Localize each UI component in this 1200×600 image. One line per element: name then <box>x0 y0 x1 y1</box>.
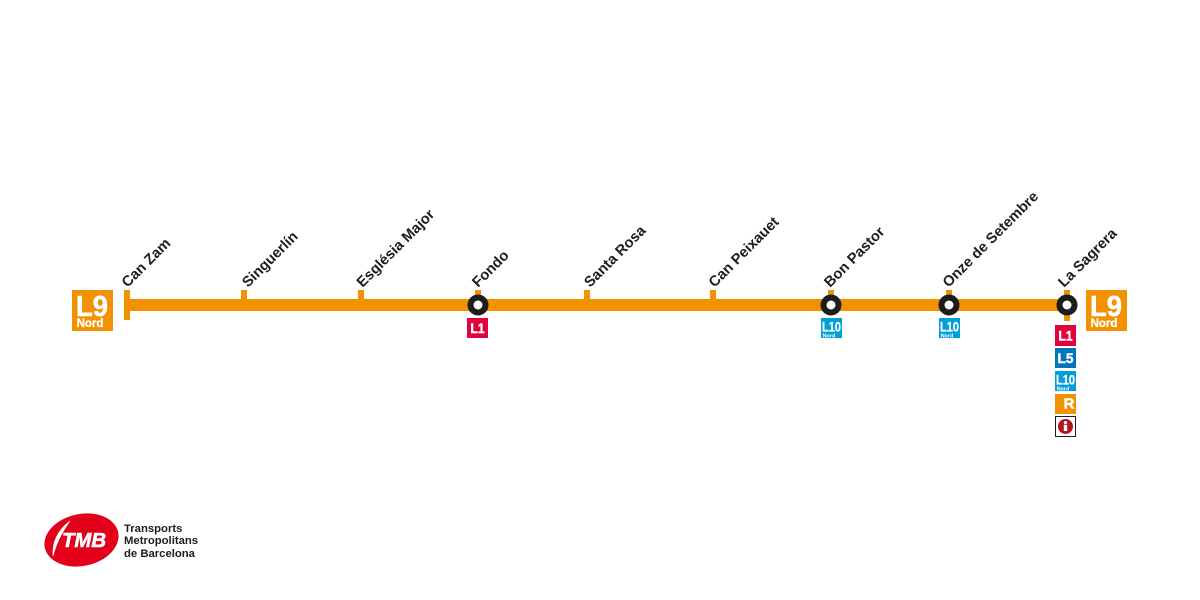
connection badge: Rodalies R: R <box>1064 396 1075 412</box>
connection badge: Rodalies R <box>1055 394 1076 414</box>
connection badge: L10 at Bon Pastor: L10 <box>822 318 841 334</box>
interchange marker: Bon Pastor <box>824 298 838 312</box>
connection badge: L10 at La Sagrera <box>1055 371 1076 392</box>
connection badge: L1 at La Sagrera: L1 <box>1058 328 1073 344</box>
station label: Santa Rosa: Santa Rosa <box>582 222 650 291</box>
connection badge: L10 at Onze de Setembre: L10 <box>940 318 959 334</box>
logo wordmark: Transports <box>124 523 182 535</box>
connection badge: L10 at La Sagrera: Nord <box>1057 386 1069 392</box>
L9 Nord badge: right: Nord <box>1091 318 1117 330</box>
connection badge: L1 at Fondo <box>467 318 488 338</box>
L9 Nord badge: right <box>1086 290 1127 331</box>
connection badge: L1 at Fondo: L1 <box>470 320 485 336</box>
station label: Can Zam: Can Zam <box>119 236 174 291</box>
connection badge: L10 at La Sagrera: L10 <box>1056 372 1075 388</box>
logo wordmark: Metropolitans <box>124 535 198 547</box>
station label: Singuerlín: Singuerlín <box>240 229 302 291</box>
connection badge: L5 at La Sagrera: L5 <box>1058 350 1074 366</box>
station label: Bon Pastor: Bon Pastor <box>822 224 888 291</box>
L9 Nord badge: left <box>72 290 113 331</box>
L9 Nord badge: left: Nord <box>77 318 103 330</box>
line track: L9 Nord <box>124 290 1070 321</box>
logo wordmark <box>124 523 198 560</box>
logo wordmark: de Barcelona <box>124 548 196 560</box>
station label: Fondo: Fondo <box>470 248 513 291</box>
connection badge: L1 at La Sagrera <box>1055 325 1076 346</box>
station label: La Sagrera: La Sagrera <box>1056 225 1121 291</box>
interchange marker: La Sagrera <box>1060 298 1074 312</box>
station label: Onze de Setembre: Onze de Setembre <box>940 189 1042 291</box>
connection badge: L10 at Bon Pastor <box>821 318 842 340</box>
connection badge: L10 at Onze de Setembre: Nord <box>941 334 953 340</box>
interchange marker: Onze de Setembre <box>942 298 956 312</box>
logo: TMB <box>39 507 198 573</box>
interchange marker: Fondo <box>470 298 486 312</box>
station label: Església Major: Església Major <box>354 207 438 291</box>
L9 Nord badge: left: L9 <box>76 291 108 323</box>
L9 Nord badge: right: L9 <box>1090 291 1122 323</box>
logo mark: red ellipse: TMB <box>62 530 106 552</box>
station label: Can Peixauet: Can Peixauet <box>706 214 783 291</box>
logo mark: red ellipse <box>39 507 124 573</box>
connection badge: L10 at Onze de Setembre <box>939 318 960 340</box>
connection badge: L10 at Bon Pastor: Nord <box>823 334 835 340</box>
connection badge: L5 at La Sagrera <box>1055 348 1076 368</box>
icon: information point <box>1056 416 1076 436</box>
